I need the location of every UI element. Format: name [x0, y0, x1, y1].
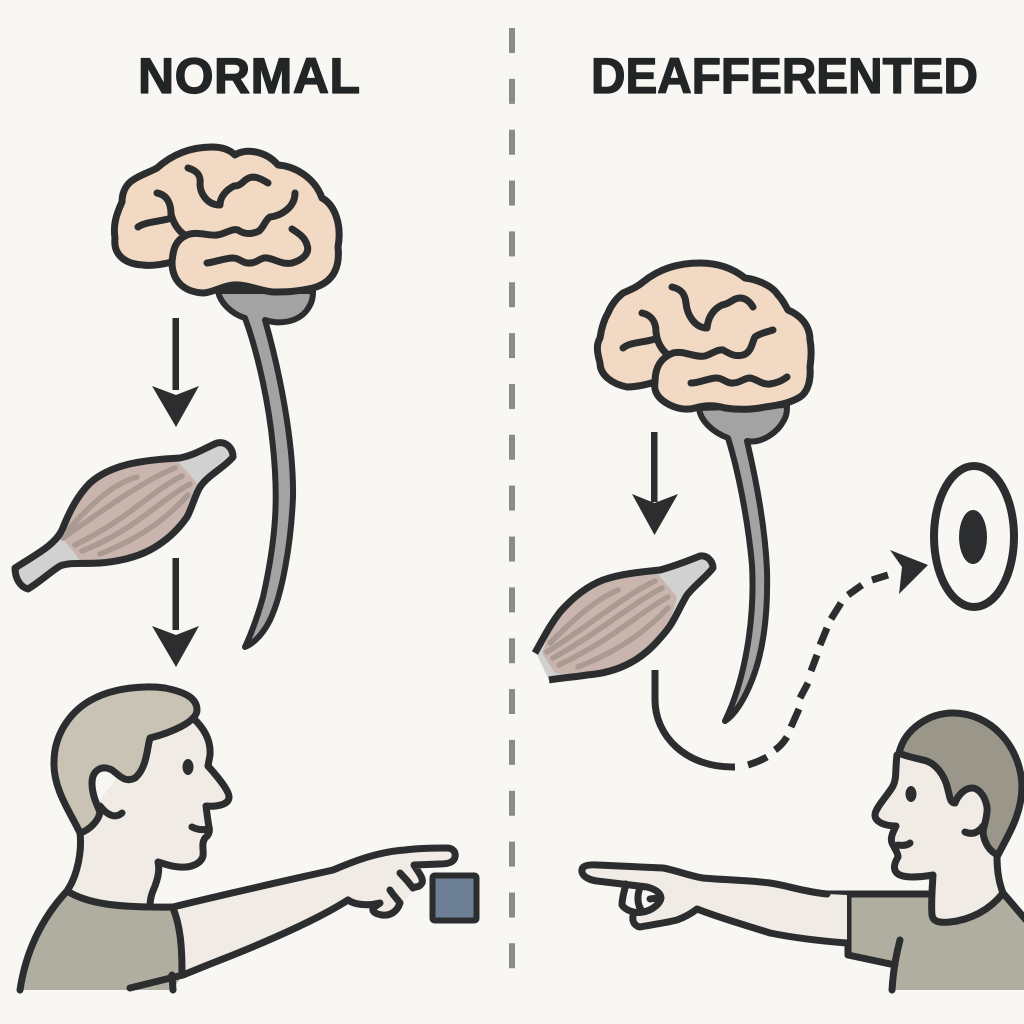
centre divider	[509, 28, 515, 970]
person: deafferented, pointing	[582, 713, 1024, 990]
muscle: deafferented	[535, 556, 713, 680]
person: normal, pointing at target	[20, 687, 476, 990]
heading: normal: NORMAL	[138, 48, 360, 104]
head and neck	[875, 755, 1003, 922]
brain outline	[597, 263, 811, 409]
muscle: normal	[15, 443, 233, 589]
target square	[432, 876, 476, 920]
eye	[182, 759, 194, 775]
face profile and shirt lines	[827, 755, 1024, 990]
feedback path: solid line into dashed arrow	[655, 550, 928, 767]
brainstem and spinal cord	[218, 291, 313, 647]
hair	[899, 713, 1022, 855]
pointing arm	[582, 865, 847, 943]
arrow: brain to muscle	[152, 318, 199, 427]
brainstem and spinal cord	[699, 405, 787, 721]
shirt	[848, 893, 1024, 990]
brain outline	[114, 147, 339, 293]
heading: deafferented: DEAFFERENTED	[591, 48, 978, 104]
head and neck	[67, 718, 229, 906]
brain folds	[138, 168, 308, 263]
shirt	[20, 891, 183, 990]
brain and spinal cord: normal	[114, 147, 339, 647]
arrow: brain to muscle	[632, 432, 678, 535]
arrow: muscle to arm	[152, 558, 199, 667]
face profile and neck lines	[20, 718, 229, 990]
pointing arm	[173, 848, 455, 975]
brain folds	[623, 287, 787, 384]
brain and spinal cord: deafferented	[597, 263, 811, 721]
hair	[54, 687, 197, 833]
arm outlines and fingers	[582, 865, 847, 943]
arm outlines and fingers	[130, 848, 455, 990]
panel: deafferented	[535, 263, 1024, 990]
target eye	[934, 466, 1014, 607]
panel: normal	[15, 147, 476, 990]
eye	[906, 786, 916, 802]
